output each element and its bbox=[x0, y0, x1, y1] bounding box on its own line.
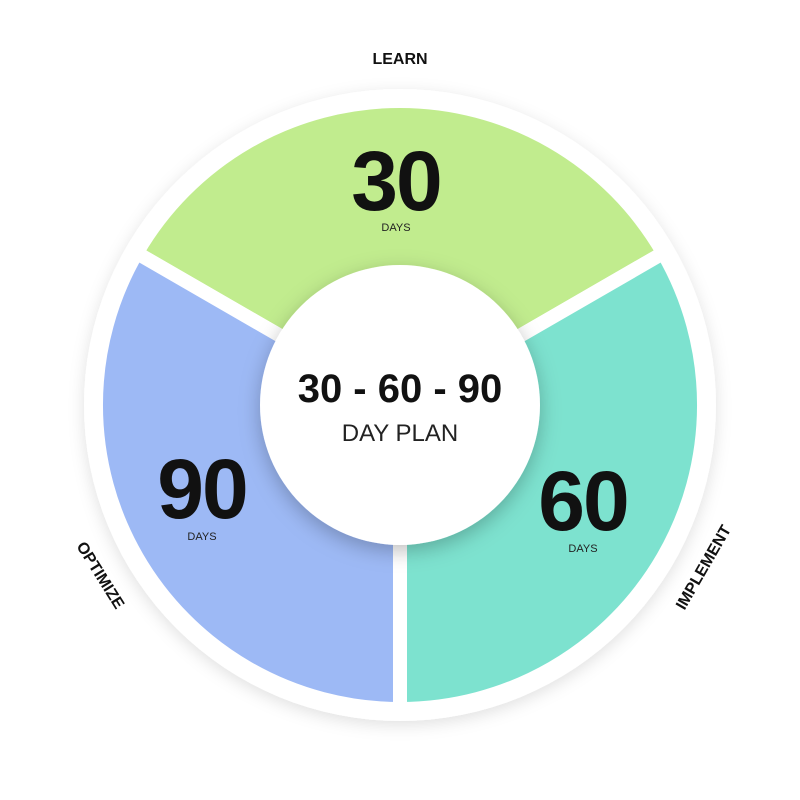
number: 60 days: 60 bbox=[538, 454, 628, 548]
center title: 30 - 60 - 90 bbox=[298, 367, 502, 411]
label: implement: IMPLEMENT bbox=[673, 523, 735, 613]
number: 90 days: 90 bbox=[157, 442, 247, 536]
segment: learn (green) bbox=[137, 101, 663, 405]
center circle bbox=[260, 265, 540, 545]
label: learn: LEARN bbox=[372, 51, 428, 68]
outer ring bbox=[84, 89, 716, 721]
center title bbox=[298, 367, 502, 447]
center title: DAY PLAN bbox=[342, 420, 458, 447]
segment: implement (teal) bbox=[400, 253, 704, 709]
label: optimize: OPTIMIZE bbox=[73, 539, 127, 612]
number: 30 days: 30 bbox=[351, 134, 441, 228]
number: 60 days: DAYS bbox=[568, 543, 598, 555]
number: 30 days: DAYS bbox=[381, 222, 411, 234]
number: 90 days: DAYS bbox=[187, 531, 217, 543]
segment: optimize (blue) bbox=[96, 253, 400, 709]
